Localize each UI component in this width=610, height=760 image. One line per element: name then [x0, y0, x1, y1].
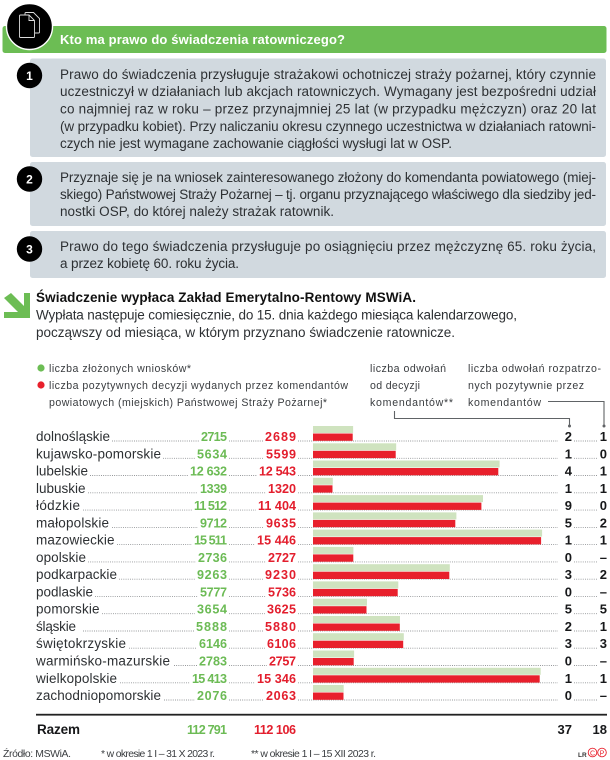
row: świętokrzyskie: 3: [600, 636, 607, 651]
row: opolskie: 2736: [198, 551, 227, 565]
row: wielkopolskie: [35, 668, 607, 686]
row: warmińsko-mazurskie: 2783: [199, 654, 227, 668]
panel: point 3: [30, 231, 606, 278]
row: mazowieckie: 15 511: [194, 534, 227, 548]
row: kujawsko-pomorskie: 5599: [266, 447, 296, 461]
row: dolnośląskie: [36, 426, 607, 444]
row: mazowieckie: mazowieckie: [36, 533, 114, 548]
footer: source and notes: * w okresie 1 I – 31 X 2023 r.: [101, 749, 215, 760]
panel: point 2: [30, 162, 606, 226]
row: lubelskie: lubelskie: [36, 464, 88, 478]
row: lubuskie: lubuskie: [36, 481, 86, 496]
text block: point 2: [60, 170, 596, 219]
panel: point 1: [30, 58, 606, 157]
row: świętokrzyskie: 3: [565, 636, 572, 651]
text block: point 1: czych nie jest wymagane zachowanie ciągłości wysługi lat w OSP.: [60, 136, 452, 151]
row: pomorskie: 5: [600, 602, 607, 617]
totals row: [37, 722, 607, 737]
row: kujawsko-pomorskie: 1: [565, 446, 572, 461]
row: podlaskie: podlaskie: [36, 584, 93, 599]
badge: 2: [17, 166, 42, 192]
column header: appeals accepted: nych pozytywnie przez: [468, 380, 584, 392]
row: świętokrzyskie: 6146: [199, 637, 227, 651]
row: małopolskie: [36, 512, 607, 530]
row: kujawsko-pomorskie: 0: [600, 446, 607, 461]
row: opolskie: 2727: [268, 551, 296, 565]
row: świętokrzyskie: 6106: [267, 637, 296, 651]
row: śląskie: [36, 616, 607, 634]
row: pomorskie: pomorskie: [36, 602, 100, 617]
row: dolnośląskie: 2715: [201, 430, 227, 444]
row: warmińsko-mazurskie: warmińsko-mazurskie: [35, 654, 170, 668]
row: kujawsko-pomorskie: 5634: [197, 447, 227, 461]
row: lubelskie: 1: [600, 464, 607, 478]
row: śląskie: 1: [600, 619, 607, 634]
text block: payer: [36, 290, 517, 340]
text block: point 3: [60, 239, 596, 271]
row: wielkopolskie: 15 413: [192, 672, 227, 686]
text block: payer: Świadczenie wypłaca Zakład Emerytalno-Rentowy MSWiA.: [36, 290, 416, 305]
row: mazowieckie: 1: [565, 533, 572, 548]
row: łódzkie: łódzkie: [36, 498, 80, 513]
row: podlaskie: –: [600, 584, 607, 599]
row: pomorskie: 3625: [267, 603, 296, 617]
totals row: 112 791: [187, 723, 227, 737]
text block: point 3: Prawo do tego świadczenia przysługuje po osiągnięciu przez mężczyznę 65. roku życia,: [60, 239, 596, 254]
row: podlaskie: [36, 581, 607, 599]
row: zachodniopomorskie: 2076: [197, 689, 227, 703]
row: wielkopolskie: 1: [600, 671, 607, 686]
text block: point 1: uczestniczył w działaniach lub akcjach ratowniczych. Wymagany jest bezpośredni udział: [60, 84, 596, 99]
badge: 1: [17, 63, 42, 88]
row: lubuskie: [36, 478, 607, 496]
badge: 3: 3: [26, 242, 33, 256]
row: warmińsko-mazurskie: 0: [565, 654, 572, 668]
text block: point 2: nostki OSP, do której należy strażak ratownik.: [60, 204, 334, 219]
text block: point 1: (w przypadku kobiet). Przy naliczaniu okresu czynnego uczestnictwa w działaniach ratowni-: [60, 119, 596, 134]
row: podkarpackie: 9263: [197, 568, 227, 582]
column header: appeals accepted: liczba odwołań rozpatrzo-: [468, 363, 601, 375]
badge: 1: 1: [26, 69, 33, 83]
row: lubuskie: 1339: [200, 482, 227, 496]
column header: appeals accepted: [468, 363, 601, 409]
row: opolskie: –: [600, 550, 607, 565]
row: świętokrzyskie: świętokrzyskie: [36, 636, 126, 651]
footer: source and notes: [3, 747, 376, 760]
row: warmińsko-mazurskie: –: [600, 654, 607, 668]
row: wielkopolskie: wielkopolskie: [35, 671, 117, 686]
column header: appeals: komendantów**: [370, 397, 453, 409]
row: wielkopolskie: 1: [565, 671, 572, 686]
footer: source and notes: Źródło: MSWiA.: [3, 747, 71, 760]
totals row: 18: [593, 722, 607, 737]
row: zachodniopomorskie: –: [600, 688, 607, 703]
icon: copyright marks: P: [600, 750, 605, 757]
badge: 3: [17, 236, 42, 262]
row: lubuskie: 1320: [268, 482, 296, 496]
header bar: [2, 26, 606, 53]
row: zachodniopomorskie: [36, 685, 607, 703]
icon: copyright marks: [578, 748, 606, 759]
row: zachodniopomorskie: zachodniopomorskie: [36, 688, 161, 703]
icon: documents: [6, 4, 52, 50]
arrow: accepted connector: [548, 402, 606, 428]
row: zachodniopomorskie: 2063: [266, 689, 296, 703]
row: łódzkie: 11 404: [258, 499, 296, 513]
row: kujawsko-pomorskie: kujawsko-pomorskie: [36, 446, 161, 461]
row: podkarpackie: 9230: [265, 568, 296, 582]
row: kujawsko-pomorskie: [36, 443, 607, 461]
text block: payer: począwszy od miesiąca, w którym przyznano świadczenie ratownicze.: [36, 325, 455, 340]
row: dolnośląskie: 1: [600, 429, 607, 444]
row: świętokrzyskie: [36, 633, 607, 651]
row: małopolskie: 2: [600, 515, 607, 530]
table: voivodeship rows: [35, 426, 607, 703]
row: podkarpackie: 2: [600, 567, 607, 582]
heading: Kto ma prawo do świadczenia ratowniczego?: [60, 32, 345, 47]
row: podlaskie: 0: [565, 584, 572, 599]
row: opolskie: opolskie: [36, 550, 86, 565]
row: śląskie: 2: [565, 619, 572, 634]
row: śląskie: 5888: [196, 620, 227, 634]
row: mazowieckie: 15 446: [257, 534, 296, 548]
legend: [37, 363, 348, 409]
row: lubelskie: 4: [565, 464, 573, 478]
row: lubelskie: [36, 460, 607, 478]
row: zachodniopomorskie: 0: [565, 688, 572, 703]
row: małopolskie: małopolskie: [36, 515, 109, 530]
column header: appeals: liczba odwołań: [370, 363, 446, 375]
row: lubuskie: 1: [600, 481, 607, 496]
text block: payer: Wypłata następuje comiesięcznie, do 15. dnia każdego miesiąca kalendarzowego,: [36, 308, 517, 322]
row: mazowieckie: [36, 530, 607, 548]
row: małopolskie: 5: [565, 515, 572, 530]
text block: point 1: [60, 67, 596, 151]
row: łódzkie: 11 512: [194, 499, 227, 513]
arrow: appeals connector: [394, 411, 571, 428]
row: małopolskie: 9635: [266, 516, 296, 530]
totals row: Razem: [37, 722, 80, 737]
row: lubelskie: 12 632: [190, 464, 227, 478]
row: łódzkie: 9: [565, 498, 572, 513]
legend: powiatowych (miejskich) Państwowej Straży Pożarnej*: [49, 397, 327, 409]
row: pomorskie: 5: [565, 602, 572, 617]
column header: appeals accepted: komendantów: [468, 397, 541, 409]
row: pomorskie: 3654: [197, 603, 227, 617]
legend: liczba złożonych wniosków*: [49, 363, 191, 375]
column header: appeals: od decyzji: [370, 380, 420, 392]
icon: copyright marks: LR: [578, 752, 587, 759]
row: łódzkie: [36, 495, 607, 513]
row: mazowieckie: 1: [600, 533, 607, 548]
row: dolnośląskie: 2689: [265, 430, 296, 444]
text block: point 3: a przez kobietę 60. roku życia.: [60, 256, 239, 271]
totals row: 112 106: [254, 723, 296, 737]
row: warmińsko-mazurskie: [35, 650, 607, 668]
row: podlaskie: 5777: [200, 585, 227, 599]
row: śląskie: śląskie: [36, 619, 76, 634]
row: lubuskie: 1: [565, 481, 572, 496]
text block: point 1: co najmniej raz w roku – przez przynajmniej 25 lat (w przypadku mężczyzn) oraz 20 lat: [60, 102, 596, 116]
row: łódzkie: 0: [600, 498, 607, 513]
row: dolnośląskie: dolnośląskie: [36, 429, 110, 444]
text block: point 1: Prawo do świadczenia przysługuje strażakowi ochotniczej straży pożarnej, który czynnie: [60, 67, 596, 82]
text block: point 2: skiego) Państwowej Straży Pożarnej – tj. organu przyznającego właściwego dla siedziby jed-: [60, 187, 596, 202]
row: podkarpackie: [36, 564, 607, 582]
row: warmińsko-mazurskie: 2757: [269, 654, 296, 668]
row: opolskie: 0: [565, 550, 572, 565]
text block: point 2: Przyznaje się je na wniosek zainteresowanego złożony do komendanta powiatowego (miej-: [60, 170, 596, 185]
legend: liczba pozytywnych decyzji wydanych przez komendantów: [49, 380, 348, 392]
icon: green arrow: [4, 293, 30, 318]
badge: 2: 2: [26, 172, 33, 186]
row: wielkopolskie: 15 346: [257, 672, 296, 686]
row: małopolskie: 9712: [200, 516, 227, 530]
row: pomorskie: [36, 599, 607, 617]
row: podkarpackie: podkarpackie: [36, 567, 117, 582]
row: lubelskie: 12 543: [259, 464, 296, 478]
footer: source and notes: ** w okresie 1 I – 15 XII 2023 r.: [251, 749, 376, 760]
row: opolskie: [36, 547, 607, 565]
column header: appeals: [370, 363, 453, 409]
row: dolnośląskie: 2: [565, 429, 572, 444]
row: śląskie: 5880: [265, 620, 296, 634]
totals row: 37: [558, 722, 572, 737]
icon: copyright marks: C: [590, 750, 595, 757]
row: podkarpackie: 3: [565, 567, 572, 582]
row: podlaskie: 5736: [268, 585, 296, 599]
